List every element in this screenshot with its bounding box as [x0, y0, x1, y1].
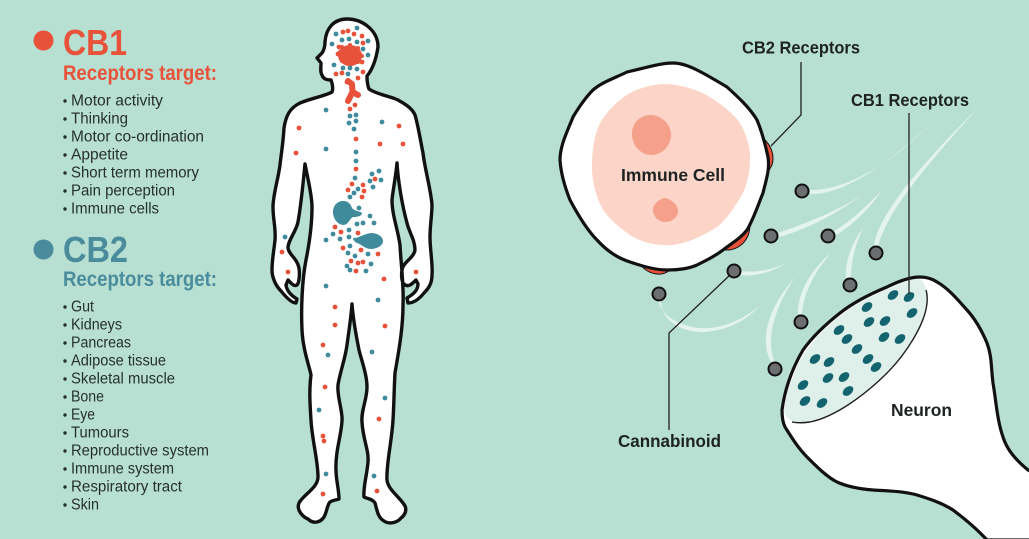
- brain: [338, 43, 364, 68]
- cannabinoid molecules: [652, 184, 882, 376]
- list: CB2 targets: Skin: [71, 496, 99, 514]
- list: CB1 targets: Short term memory: [71, 164, 199, 182]
- panel: neuron: [782, 277, 1029, 539]
- label: Neuron: Neuron: [891, 400, 952, 420]
- icon: CB2 teal dot: [34, 240, 54, 260]
- organ: liver: [333, 201, 362, 225]
- list: CB1 targets: Motor co-ordination: [71, 128, 204, 146]
- list: CB1 targets: Appetite: [71, 146, 128, 164]
- list: CB2 targets: Adipose tissue: [71, 352, 166, 370]
- label: Cannabinoid: Cannabinoid: [618, 431, 721, 451]
- subheading: CB2 receptors target: Receptors target:: [63, 268, 217, 291]
- CB2 receptors on cell surface: [640, 138, 773, 274]
- heading: CB1: CB1: [63, 22, 127, 63]
- terminal lower edge: [792, 290, 927, 423]
- list: CB2 targets: [63, 298, 209, 514]
- leader line: CB2 receptors: [771, 62, 801, 146]
- panel: CB1 legend: [34, 22, 217, 218]
- list: CB1 targets: Thinking: [71, 110, 128, 128]
- panel: immune cell: [560, 63, 773, 274]
- list: CB2 targets: Immune system: [71, 460, 174, 478]
- icon: CB1 red dot: [34, 30, 54, 50]
- list: CB1 targets: [63, 92, 204, 218]
- leader line: CB1 receptors: [908, 113, 910, 294]
- brain stem: [348, 81, 358, 101]
- organ: pancreas: [353, 233, 383, 249]
- small organelle: [653, 198, 678, 222]
- label: CB1 Receptors: CB1 Receptors: [851, 90, 969, 110]
- list: CB1 targets: Pain perception: [71, 182, 175, 200]
- neuron body: [782, 277, 1029, 539]
- CB2 receptor dots: [283, 26, 387, 478]
- list: CB2 targets: Tumours: [71, 424, 129, 442]
- large organelle: [632, 115, 671, 155]
- leader line: cannabinoid: [669, 274, 731, 430]
- list: CB2 targets: Reproductive system: [71, 442, 209, 460]
- list: CB2 targets: Skeletal muscle: [71, 370, 175, 388]
- list: CB2 targets: Bone: [71, 388, 104, 406]
- tails: cannabinoid motion trails: [658, 108, 978, 362]
- panel: CB2 legend: [34, 229, 217, 514]
- label: Immune Cell: Immune Cell: [621, 165, 725, 185]
- heading: CB2: CB2: [63, 229, 128, 270]
- subheading: CB1 receptors target: Receptors target:: [63, 62, 217, 85]
- list: CB1 targets: Motor activity: [71, 92, 163, 110]
- label: CB2 Receptors: CB2 Receptors: [742, 38, 860, 58]
- list: CB2 targets: Respiratory tract: [71, 478, 183, 496]
- CB1 receptor dots: [280, 29, 418, 496]
- list: CB1 targets: Immune cells: [71, 200, 159, 218]
- body outline: [272, 19, 432, 523]
- CB1 receptors on neuron: [796, 288, 919, 410]
- list: CB2 targets: Pancreas: [71, 334, 131, 352]
- panel: human body diagram: [272, 19, 432, 523]
- list: CB2 targets: Eye: [71, 406, 95, 424]
- list: CB2 targets: Gut: [71, 298, 95, 316]
- cell nucleus: [592, 84, 750, 245]
- cell membrane: [560, 63, 769, 270]
- list: CB2 targets: Kidneys: [71, 316, 122, 334]
- neuron terminal surface: [784, 279, 927, 423]
